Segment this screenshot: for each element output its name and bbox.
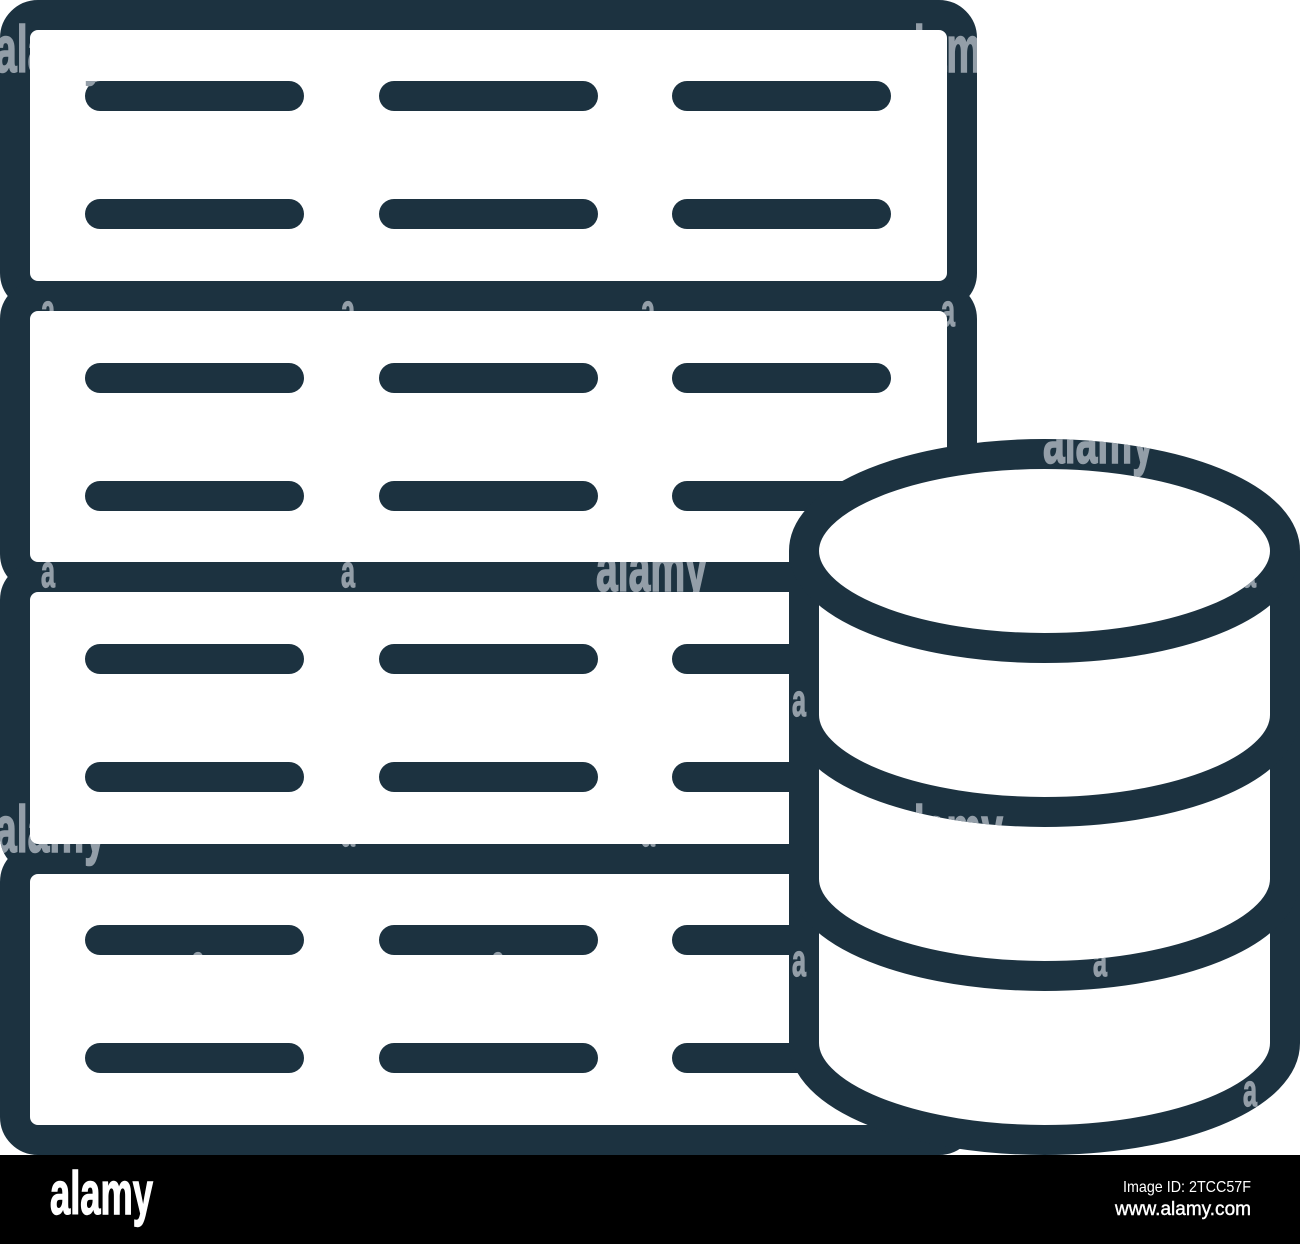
row 4 frame <box>15 859 962 1140</box>
watermark pattern on icon strokes: alamy <box>892 792 1003 866</box>
watermark pattern on icon strokes: a <box>41 546 56 597</box>
watermark pattern on icon strokes: a <box>1242 546 1257 597</box>
cylinder tier line 2 <box>804 879 1285 976</box>
watermark pattern on icon strokes: alamy <box>0 792 106 866</box>
row 1 frame <box>15 15 962 296</box>
watermark pattern on icon strokes: alamy <box>892 12 1003 86</box>
watermark pattern on icon strokes: a <box>792 675 807 726</box>
watermark pattern on icon strokes: alamy <box>0 12 106 86</box>
row 1 data lines <box>85 81 891 229</box>
icon: database cylinder <box>804 454 1285 1140</box>
watermark pattern on icon strokes: a <box>341 805 356 856</box>
watermark pattern on icon strokes: a <box>641 805 656 856</box>
panel: server row 1 <box>15 15 962 296</box>
watermark pattern on icon strokes: a <box>41 285 56 336</box>
footer bar <box>0 1155 1300 1244</box>
row 2 frame <box>15 296 962 577</box>
icon: stacked server table <box>15 15 962 1140</box>
watermark pattern on icon strokes: a <box>1243 1065 1258 1116</box>
watermark pattern on icon strokes: a <box>341 285 356 336</box>
watermark pattern on icon strokes: a <box>941 285 956 336</box>
watermark pattern on icon strokes: a <box>491 936 506 987</box>
row 3 frame <box>15 577 962 859</box>
watermark pattern on icon strokes: alamy <box>1043 403 1154 477</box>
row 4 data lines <box>85 925 891 1073</box>
panel: server row 4 <box>15 859 962 1140</box>
footer background <box>0 1155 1300 1244</box>
watermark pattern on icon strokes: a <box>191 936 206 987</box>
panel: server row 2 <box>15 296 962 577</box>
footer logo: alamy <box>50 1160 153 1227</box>
watermark pattern on icon strokes: a <box>792 935 807 986</box>
row 3 data lines <box>85 644 891 792</box>
watermark pattern on icon strokes: a <box>641 285 656 336</box>
panel: server row 3 <box>15 577 962 859</box>
website: www.alamy.com <box>1114 1199 1251 1220</box>
cylinder body <box>804 551 1285 1140</box>
image id: Image ID: 2TCC57F <box>1123 1179 1251 1196</box>
cylinder tier line 1 <box>804 715 1285 812</box>
cylinder top ellipse <box>804 454 1285 648</box>
watermark pattern on icon strokes: a <box>1093 935 1108 986</box>
watermark pattern on icon strokes: alamy <box>596 531 707 605</box>
row 2 data lines <box>85 363 891 511</box>
watermark pattern on icon strokes: a <box>341 546 356 597</box>
